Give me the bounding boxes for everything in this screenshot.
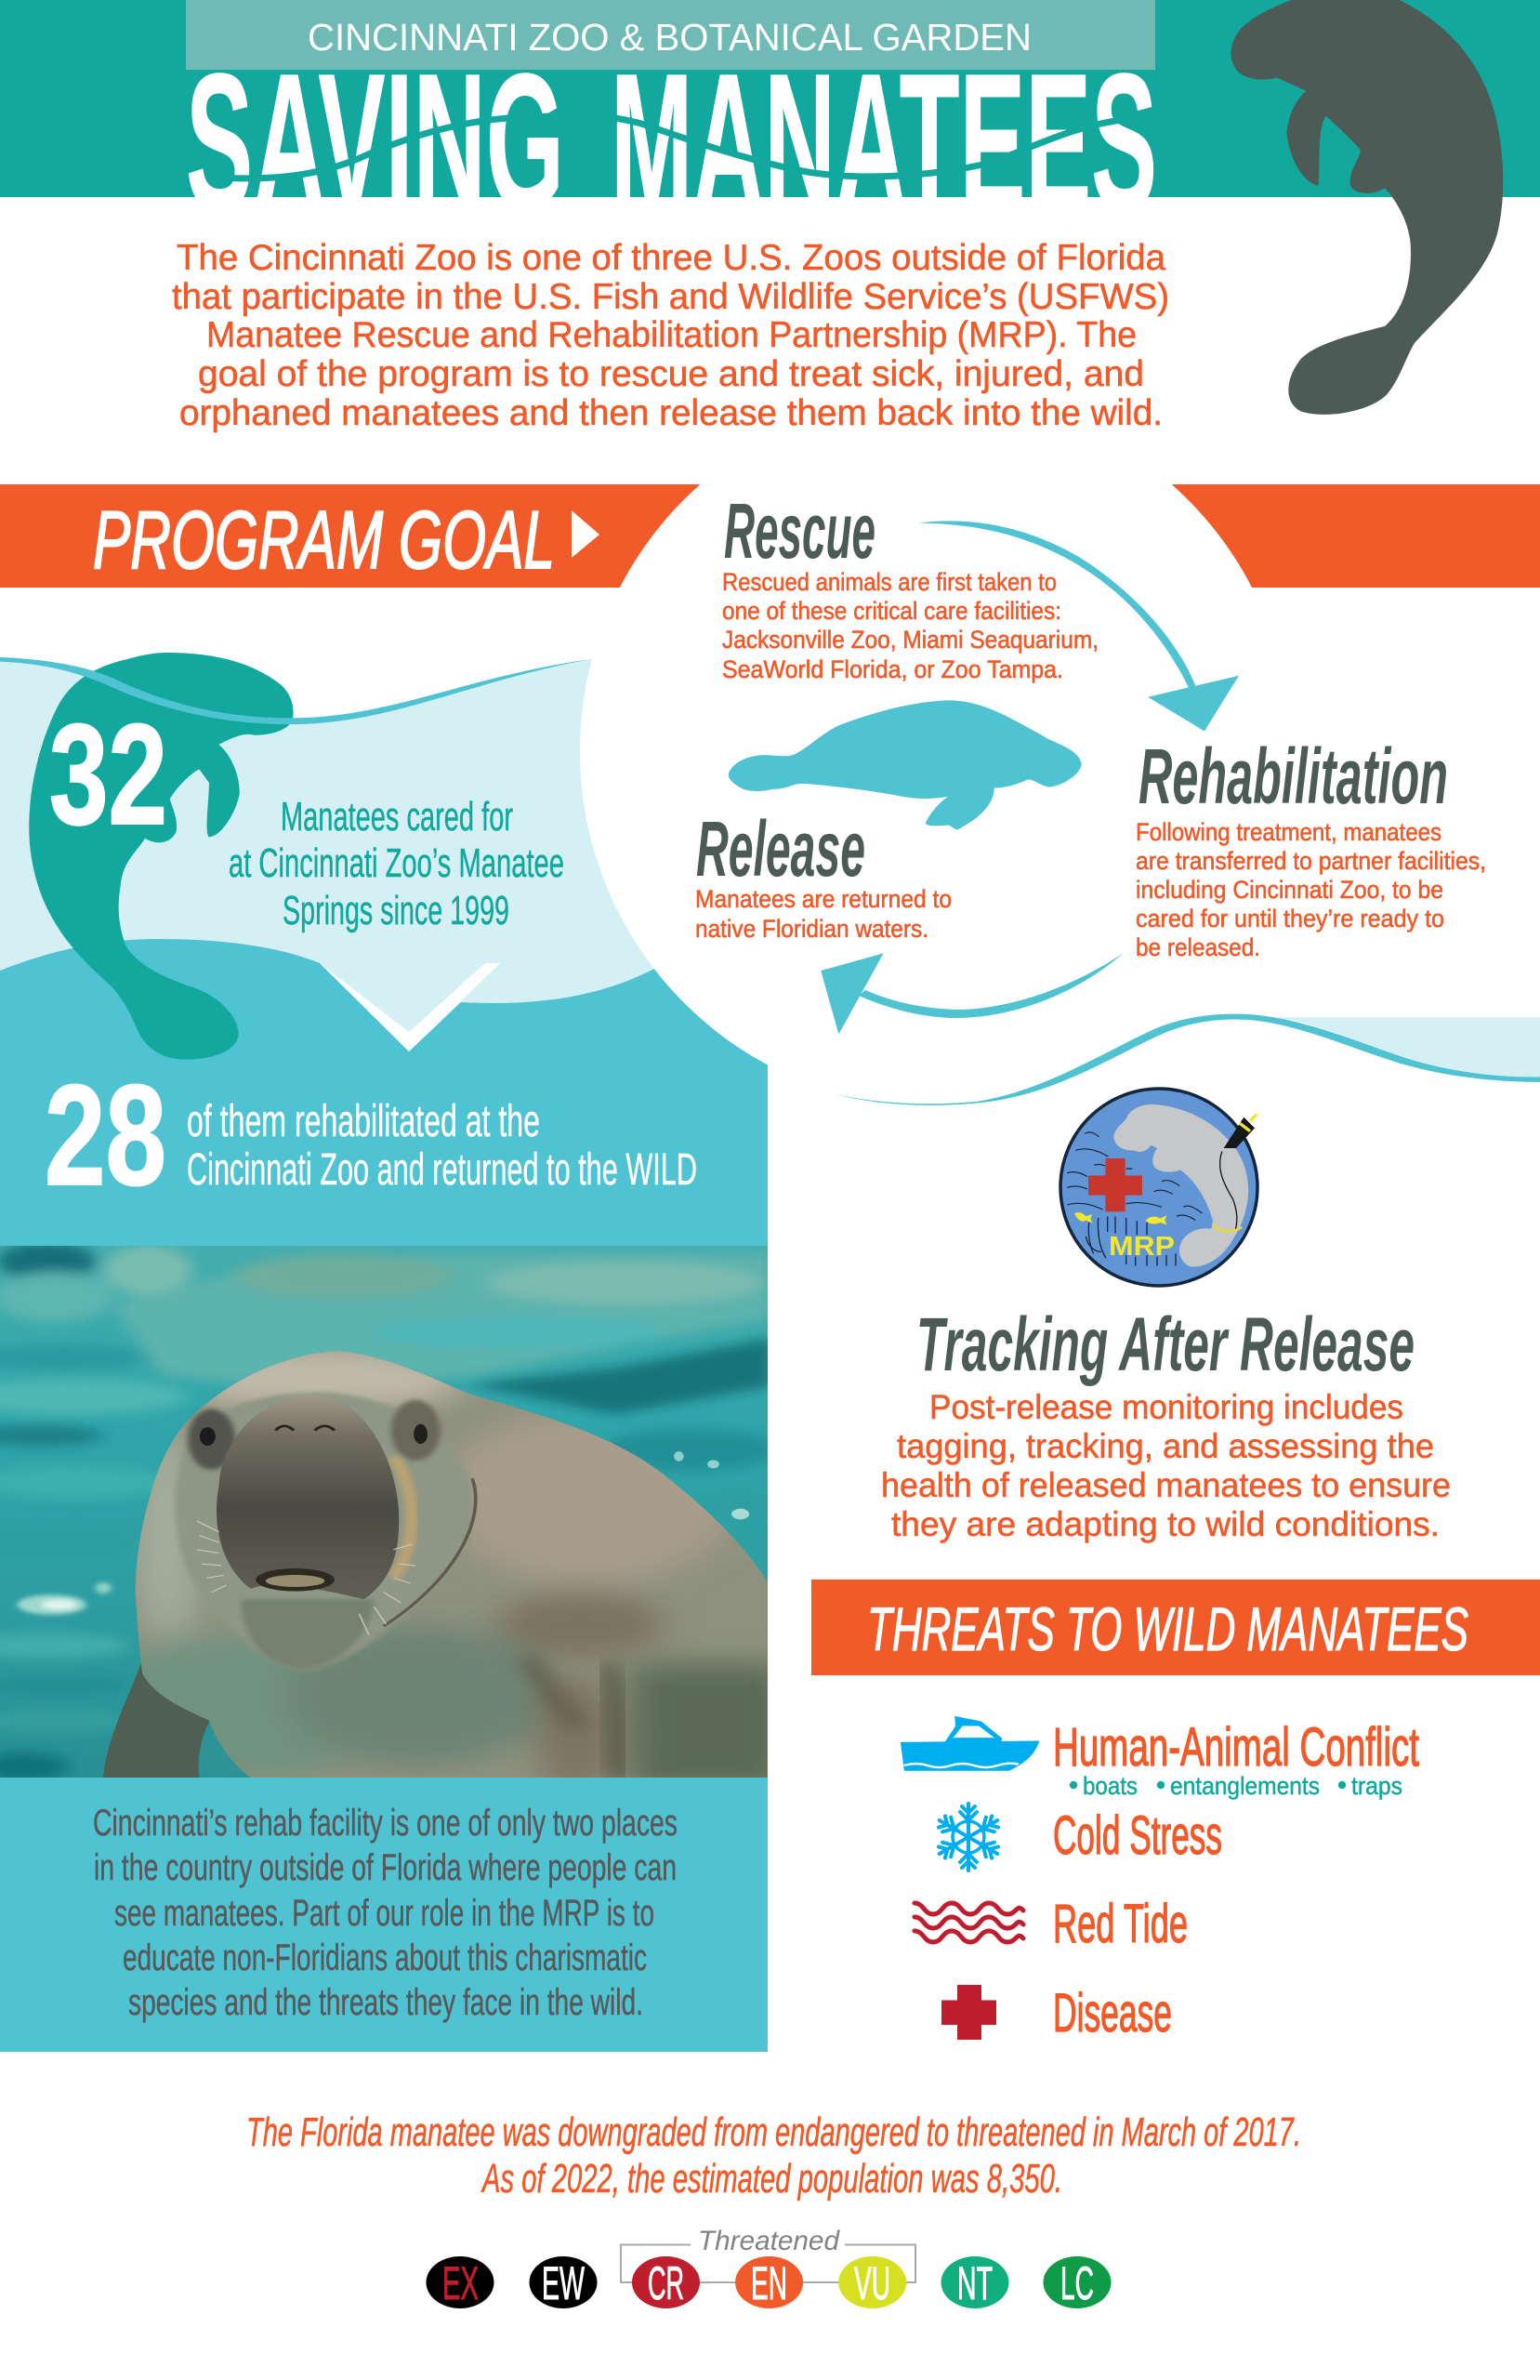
threatened label: Threatened (698, 2226, 840, 2256)
IUCN status: EN (735, 2256, 803, 2309)
title: Saving Manatees: SAVING (186, 34, 564, 250)
teal water panel hill (0, 939, 768, 1246)
MRP logo (1060, 1089, 1257, 1286)
IUCN status: CR (632, 2256, 700, 2309)
release step (695, 805, 952, 943)
intro paragraph (172, 238, 1169, 433)
rehabilitation text: cared for until they’re ready to (1136, 905, 1444, 932)
icon: red tide waves (915, 1903, 1023, 1942)
tracking text (881, 1388, 1451, 1543)
facility paragraph: see manatees. Part of our role in the MRP is to (114, 1893, 654, 1934)
IUCN status: VU: VU (854, 2257, 890, 2309)
icon: medical cross (941, 1985, 996, 2040)
program goal arrow (572, 510, 599, 558)
rescue text (722, 568, 1099, 683)
tracking text: Post-release monitoring includes (929, 1388, 1403, 1426)
photo: manatee underwater (0, 1236, 787, 1795)
down chevron (320, 963, 500, 1051)
IUCN status: CR: CR (648, 2257, 684, 2309)
white area below header masks title baseline (0, 197, 1540, 210)
title wave stroke (218, 115, 1127, 178)
threat: cold stress: Cold Stress (1053, 1805, 1222, 1866)
surface wave line (0, 657, 592, 724)
rescue text: Jacksonville Zoo, Miami Seaquarium, (722, 626, 1099, 654)
conservation status note (246, 2109, 1301, 2202)
IUCN status: EW: EW (542, 2257, 585, 2309)
header band (0, 0, 1540, 197)
release text: native Floridian waters. (695, 915, 928, 943)
threats band (811, 1580, 1540, 1675)
facility paragraph: educate non-Floridians about this charismatic (123, 1937, 647, 1978)
release text (695, 885, 952, 943)
IUCN status: EX: EX (442, 2257, 479, 2309)
threat examples: boats (1083, 1772, 1138, 1800)
rehabilitation text: are transferred to partner facilities, (1136, 847, 1486, 875)
intro paragraph: The Cincinnati Zoo is one of three U.S. Zoos outside of Florida (177, 238, 1165, 278)
tracking text: tagging, tracking, and assessing the (897, 1427, 1434, 1465)
MRP logo text: MRP (1109, 1232, 1175, 1262)
threat examples: traps (1351, 1772, 1402, 1800)
stat caption: rehabilitated (187, 1097, 697, 1195)
intro paragraph: that participate in the U.S. Fish and Wildlife Service’s (USFWS) (172, 277, 1169, 317)
rescue text: Rescued animals are first taken to (722, 568, 1057, 596)
release text: Manatees are returned to (695, 885, 952, 913)
rehabilitation text: Following treatment, manatees (1136, 818, 1441, 846)
threat: disease: Disease (1053, 1983, 1172, 2043)
rescue text: one of these critical care facilities: (722, 597, 1061, 625)
threat: red tide: Red Tide (1053, 1894, 1188, 1954)
IUCN status: LC (1043, 2256, 1112, 2309)
IUCN status: VU (838, 2256, 906, 2309)
rescue heading: Rescue (724, 487, 875, 575)
threat examples: entanglements (1170, 1772, 1320, 1800)
program goal heading: PROGRAM GOAL (93, 494, 555, 586)
rescue step (722, 487, 1099, 683)
stat caption: manatees cared for: at Cincinnati Zoo’s Manatee (229, 840, 564, 886)
orange program goal band (0, 484, 1540, 588)
left flipper (103, 1662, 210, 1778)
conservation status note: As of 2022, the estimated population was 8,350. (480, 2156, 1062, 2202)
arrow: rescue to rehabilitation (918, 521, 1239, 731)
stat caption: rehabilitated: of them rehabilitated at the (187, 1097, 540, 1146)
right water area and wave (835, 1014, 1540, 1105)
rehabilitation step (1136, 733, 1486, 961)
threatened bracket (621, 2226, 915, 2282)
stat caption: rehabilitated: Cincinnati Zoo and returned to the WILD (187, 1145, 697, 1195)
IUCN status: EN: EN (751, 2257, 787, 2309)
icon: boat (901, 1716, 1039, 1771)
stat caption: manatees cared for: Springs since 1999 (283, 888, 509, 933)
cyan manatee silhouette (729, 700, 1082, 830)
rehabilitation text (1136, 818, 1486, 961)
intro paragraph: Manatee Rescue and Rehabilitation Partnership (MRP). The (206, 315, 1137, 355)
face (176, 1393, 474, 1670)
IUCN status: EW (530, 2256, 597, 2309)
stat: 32: 32 (49, 694, 167, 854)
stat caption: manatees cared for: Manatees cared for (281, 794, 513, 840)
intro paragraph: orphaned manatees and then release them back into the wild. (179, 393, 1163, 433)
IUCN status: NT: NT (957, 2257, 993, 2309)
threat examples (1070, 1772, 1402, 1800)
tracking text: health of released manatees to ensure (881, 1466, 1451, 1504)
arrow: rehabilitation to release (821, 953, 1124, 1034)
rehabilitation text: be released. (1136, 933, 1260, 961)
dark manatee silhouette (1231, 0, 1503, 415)
light water panel (0, 659, 713, 1022)
facility paragraph: species and the threats they face in the wild. (128, 1982, 643, 2023)
IUCN status: NT (941, 2256, 1009, 2309)
facility paragraph (93, 1803, 678, 2023)
white program circle (580, 395, 1292, 1107)
release heading: Release (696, 805, 865, 892)
tracking text: they are adapting to wild conditions. (891, 1505, 1440, 1543)
teal text panel (0, 1778, 768, 2052)
organisation name: CINCINNATI ZOO & BOTANICAL GARDEN (308, 16, 1032, 59)
rescue text: SeaWorld Florida, or Zoo Tampa. (722, 655, 1063, 683)
IUCN status: LC: LC (1060, 2257, 1094, 2309)
facility paragraph: in the country outside of Florida where people can (94, 1847, 677, 1888)
top label band (186, 0, 1155, 70)
stat caption: manatees cared for (229, 794, 564, 933)
rehabilitation text: including Cincinnati Zoo, to be (1136, 876, 1443, 904)
stat: 28: 28 (45, 1055, 166, 1215)
facility paragraph: Cincinnati’s rehab facility is one of only two places (93, 1803, 678, 1844)
IUCN status: EX (426, 2256, 494, 2309)
intro paragraph: goal of the program is to rescue and treat sick, injured, and (198, 354, 1144, 394)
teal manatee silhouette (29, 653, 294, 1060)
icon: snowflake (935, 1804, 1002, 1871)
